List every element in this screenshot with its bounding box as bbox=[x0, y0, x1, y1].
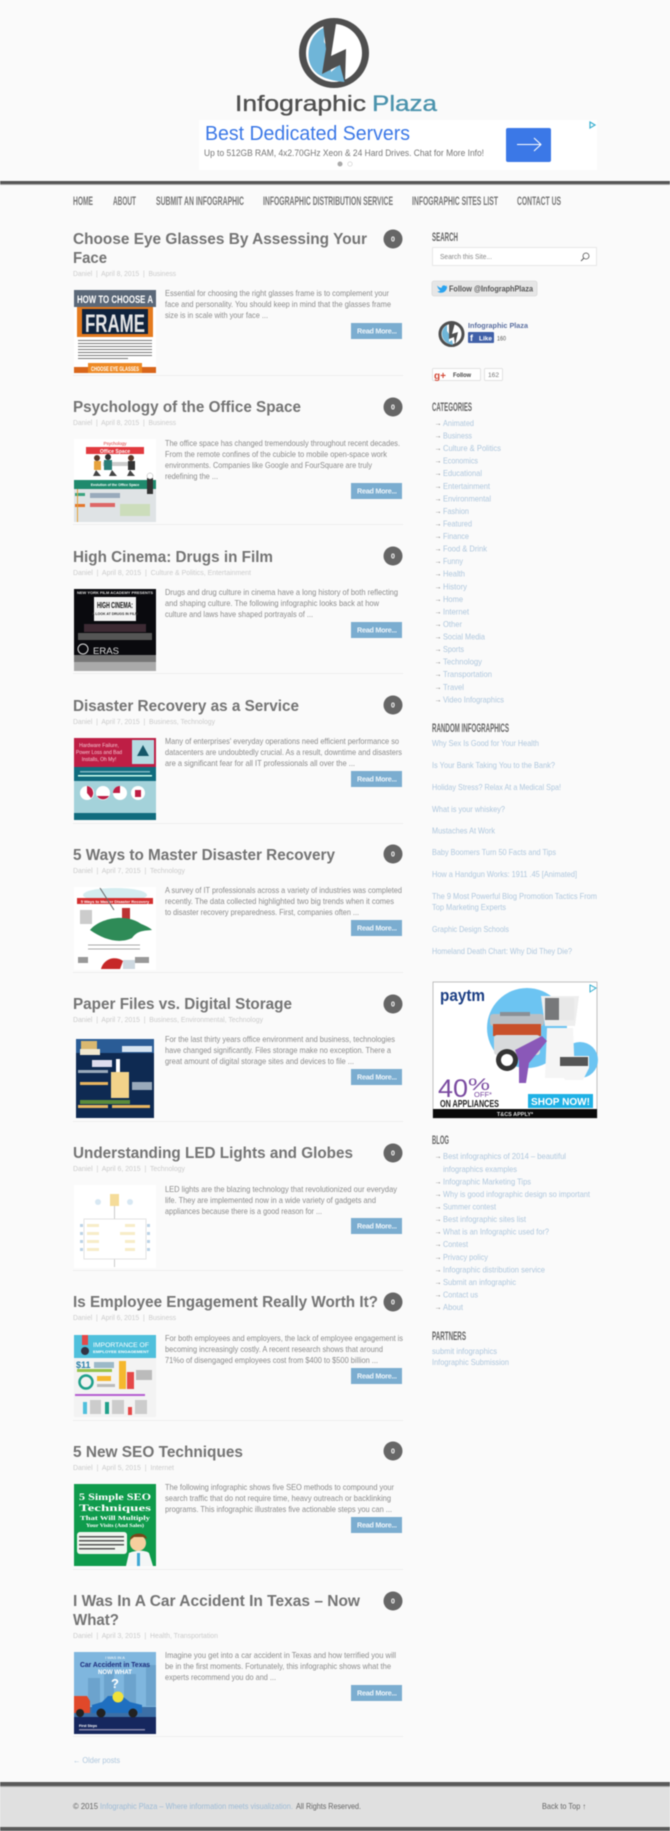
categories bbox=[432, 402, 504, 704]
excerpt bbox=[165, 1483, 394, 1514]
thumbnail: 5 Simple SEO bbox=[79, 1493, 151, 1503]
title: Understanding LED Lights and Globes bbox=[73, 1145, 353, 1162]
thumbnail bbox=[74, 290, 156, 373]
thumbnail: ERAS bbox=[93, 646, 119, 656]
twitter follow button bbox=[432, 281, 537, 296]
categories: → bbox=[434, 420, 442, 428]
categories: Finance bbox=[443, 532, 469, 541]
partners bbox=[432, 1331, 509, 1367]
facebook like box: Like bbox=[479, 336, 492, 342]
thumbnail: Techniques bbox=[79, 1504, 151, 1514]
excerpt: programs. This infographic illustrates five actionable steps you can ... bbox=[165, 1505, 392, 1514]
excerpt: From the remote confines of the cubicle to mobile open-space work bbox=[165, 450, 388, 459]
facebook like box: 160 bbox=[497, 336, 506, 342]
categories: Sports bbox=[443, 645, 464, 654]
title: High Cinema: Drugs in Film bbox=[73, 549, 273, 566]
excerpt: face and personality. You should keep in mind that the glasses frame bbox=[165, 300, 391, 309]
paytm ad: 40 bbox=[438, 1075, 468, 1103]
categories: → bbox=[434, 647, 442, 654]
back to top: Back to Top ↑ bbox=[542, 1802, 586, 1811]
categories: Business bbox=[443, 432, 472, 440]
title bbox=[73, 231, 367, 267]
read more button bbox=[351, 1218, 402, 1234]
categories: Other bbox=[443, 620, 462, 629]
thumbnail: 5 Ways to Master Disaster Recovery bbox=[81, 899, 150, 904]
post 5 bbox=[73, 844, 403, 973]
blog links: → bbox=[434, 1280, 442, 1286]
comment count bbox=[384, 1144, 402, 1162]
excerpt: culture and laws have shaped portrayals of ... bbox=[165, 610, 313, 619]
thumbnail: Evolution of the Office Space bbox=[91, 483, 139, 487]
footer bbox=[0, 1782, 670, 1831]
categories: → bbox=[434, 659, 442, 666]
excerpt: experts recommend you do and ... bbox=[165, 1673, 276, 1682]
copyright: Infographic Plaza – Where information meets visualization. bbox=[100, 1802, 293, 1811]
excerpt bbox=[165, 737, 402, 768]
thumbnail bbox=[74, 589, 156, 671]
random infographics: Graphic Design Schools bbox=[432, 925, 509, 934]
post 4 bbox=[73, 696, 403, 824]
ad banner: Best Dedicated Servers bbox=[205, 123, 410, 145]
excerpt: recently. The data collected highlighted two big trends when it comes bbox=[165, 897, 394, 906]
thumbnail: HOW TO CHOOSE A bbox=[77, 294, 153, 306]
blog links: → bbox=[434, 1179, 442, 1186]
logo wordmark: Infographic bbox=[235, 91, 366, 116]
header bbox=[199, 18, 597, 170]
categories: → bbox=[434, 471, 442, 478]
categories: → bbox=[434, 634, 442, 641]
comment count bbox=[384, 398, 402, 416]
comment count bbox=[384, 1442, 402, 1460]
random infographics: Holiday Stress? Relax At a Medical Spa! bbox=[432, 783, 561, 792]
excerpt: For both employees and employers, the lack of employee engagement is bbox=[165, 1334, 403, 1343]
read more button bbox=[351, 1368, 402, 1384]
read more button: Read More... bbox=[357, 924, 397, 932]
excerpt: Many of enterprises' everyday operations need efficient performance so bbox=[165, 737, 399, 746]
excerpt: becoming increasingly costly. A recent research shows that around bbox=[165, 1345, 383, 1354]
categories: → bbox=[434, 483, 442, 490]
post 10 bbox=[73, 1592, 403, 1737]
navigation bbox=[73, 196, 561, 208]
facebook like box: f bbox=[470, 333, 474, 343]
logo wordmark bbox=[235, 91, 438, 116]
title: Disaster Recovery as a Service bbox=[73, 698, 299, 715]
post 7 bbox=[73, 1144, 403, 1271]
read more button: Read More... bbox=[357, 486, 397, 496]
thumbnail: IMPORTANCE OF bbox=[93, 1343, 149, 1349]
categories: Fashion bbox=[443, 507, 469, 516]
excerpt: datacenters are undoubtedly crucial. As a result, downtime and disasters bbox=[165, 748, 402, 757]
read more button bbox=[351, 483, 402, 499]
search widget: Search this Site... bbox=[440, 252, 492, 261]
title: What? bbox=[73, 1612, 119, 1629]
blog links: → bbox=[434, 1229, 442, 1236]
categories: History bbox=[443, 582, 468, 591]
thumbnail: Hardware Failure, bbox=[79, 743, 119, 749]
comment count: 0 bbox=[391, 1150, 395, 1158]
paytm ad: % bbox=[468, 1075, 490, 1094]
meta: Daniel | April 5, 2015 | Internet bbox=[73, 1463, 175, 1472]
meta: Daniel | April 8, 2015 | Business bbox=[73, 269, 176, 278]
categories: → bbox=[434, 622, 442, 628]
excerpt bbox=[165, 439, 400, 481]
excerpt: LED lights are the blazing technology that revolutionized our everyday bbox=[165, 1185, 398, 1194]
thumbnail: Installs, Oh My! bbox=[82, 757, 116, 763]
thumbnail: CHOOSE EYE GLASSES bbox=[91, 367, 139, 373]
random infographics: Mustaches At Work bbox=[432, 826, 496, 836]
excerpt: are a significant fear for all IT professionals all over the ... bbox=[165, 759, 355, 768]
blog links: → bbox=[434, 1292, 442, 1299]
meta: Daniel | April 7, 2015 | Technology bbox=[73, 866, 185, 875]
excerpt: size is in scale with your face ... bbox=[165, 311, 268, 320]
partners: submit infographics bbox=[432, 1347, 497, 1356]
excerpt bbox=[165, 1334, 403, 1365]
excerpt: For the last thirty years office environment and business, technologies bbox=[165, 1035, 395, 1044]
blog links: → bbox=[434, 1216, 442, 1224]
paytm ad: T&CS APPLY* bbox=[497, 1112, 534, 1118]
comment count bbox=[384, 844, 402, 864]
blog links: Contest bbox=[443, 1240, 469, 1249]
title: Paper Files vs. Digital Storage bbox=[73, 996, 292, 1013]
random infographics: How a Handgun Works: 1911 .45 [Animated] bbox=[432, 870, 577, 879]
categories: → bbox=[434, 609, 442, 616]
excerpt: appliances because there is a good reason for ... bbox=[165, 1207, 322, 1216]
thumbnail bbox=[74, 1185, 156, 1268]
random infographics: Is Your Bank Taking You to the Bank? bbox=[432, 761, 555, 770]
excerpt: A survey of IT professionals across a variety of industries was completed bbox=[165, 886, 402, 895]
paytm ad bbox=[433, 982, 598, 1118]
excerpt: great amount of digital storage sites and devices to file ... bbox=[165, 1057, 354, 1066]
thumbnail: Car Accident in Texas bbox=[80, 1660, 150, 1669]
read more button bbox=[351, 323, 402, 339]
read more button: Read More... bbox=[357, 1372, 397, 1380]
categories: → bbox=[434, 446, 442, 453]
read more button: Read More... bbox=[357, 1520, 397, 1530]
excerpt: Imagine you get into a car accident in Texas and how terrified you will bbox=[165, 1651, 396, 1660]
categories: Transportation bbox=[443, 670, 492, 679]
blog links: → bbox=[434, 1192, 442, 1198]
navigation: HOME bbox=[73, 196, 93, 208]
read more button bbox=[351, 622, 402, 638]
thumbnail: EMPLOYEE ENGAGEMENT bbox=[93, 1349, 150, 1354]
google plus follow: Follow bbox=[453, 372, 472, 379]
random infographics: Why Sex Is Good for Your Health bbox=[432, 739, 539, 748]
post 3 bbox=[73, 546, 403, 674]
post 8 bbox=[73, 1292, 403, 1421]
excerpt: life. They are implemented now in a wide variety of gadgets and bbox=[165, 1196, 376, 1205]
thumbnail bbox=[74, 738, 156, 820]
blog links: Privacy policy bbox=[443, 1253, 489, 1262]
thumbnail bbox=[76, 1039, 154, 1118]
comment count bbox=[384, 1292, 402, 1312]
paytm ad: paytm bbox=[440, 986, 485, 1005]
excerpt: The following infographic shows five SEO methods to compound your bbox=[165, 1483, 394, 1492]
facebook like box bbox=[440, 321, 529, 346]
categories: → bbox=[434, 433, 442, 440]
categories: Health bbox=[443, 570, 465, 579]
post 2 bbox=[73, 398, 403, 525]
categories: Food & Drink bbox=[443, 545, 488, 554]
categories: → bbox=[434, 559, 442, 566]
title: 5 Ways to Master Disaster Recovery bbox=[73, 847, 335, 864]
logo wordmark: Plaza bbox=[372, 91, 438, 116]
title: Is Employee Engagement Really Worth It? bbox=[73, 1294, 378, 1311]
comment count: 0 bbox=[391, 1448, 395, 1456]
title: I Was In A Car Accident In Texas – Now bbox=[73, 1593, 361, 1610]
blog links: → bbox=[434, 1254, 442, 1262]
search widget bbox=[432, 232, 596, 266]
thumbnail: Your Visits (And Sales) bbox=[86, 1524, 144, 1529]
categories: Social Media bbox=[443, 632, 485, 642]
categories: Technology bbox=[443, 658, 483, 667]
random infographics: What is your whiskey? bbox=[432, 805, 505, 814]
thumbnail bbox=[74, 887, 156, 970]
random infographics: Homeland Death Chart: Why Did They Die? bbox=[432, 947, 572, 956]
excerpt: Essential for choosing the right glasses frame is to complement your bbox=[165, 289, 389, 298]
comment count bbox=[384, 546, 402, 566]
meta: Daniel | April 3, 2015 | Health, Transportation bbox=[73, 1631, 218, 1640]
blog links: → bbox=[434, 1204, 442, 1211]
thumbnail bbox=[74, 1335, 156, 1417]
categories: CATEGORIES bbox=[432, 402, 472, 414]
random infographics: RANDOM INFOGRAPHICS bbox=[432, 723, 509, 735]
categories: Travel bbox=[443, 683, 464, 692]
categories: → bbox=[434, 458, 442, 465]
blog links: Summer contest bbox=[443, 1202, 497, 1212]
blog links: Best infographics of 2014 – beautiful bbox=[443, 1152, 566, 1161]
twitter follow button: Follow @InfographPlaza bbox=[449, 284, 533, 294]
excerpt: 71%o of disengaged employees cost from $400 to $500 billion ... bbox=[165, 1356, 378, 1365]
categories: Featured bbox=[443, 520, 472, 528]
comment count: 0 bbox=[391, 702, 395, 710]
title: Choose Eye Glasses By Assessing Your bbox=[73, 231, 367, 248]
thumbnail bbox=[74, 439, 156, 522]
title: Psychology of the Office Space bbox=[73, 399, 301, 416]
blog links: About bbox=[443, 1303, 464, 1312]
excerpt: have changed significantly. Files storage make no exception. There a bbox=[165, 1046, 391, 1055]
blog links: Infographic Marketing Tips bbox=[443, 1178, 531, 1186]
excerpt: search traffic that do not require time, heavy outreach or backlinking bbox=[165, 1494, 391, 1503]
meta: Daniel | April 7, 2015 | Business, Environmental, Technology bbox=[73, 1015, 263, 1024]
navigation: ABOUT bbox=[113, 196, 136, 208]
categories: Home bbox=[443, 595, 463, 604]
comment count: 0 bbox=[391, 404, 395, 412]
read more button: Read More... bbox=[357, 774, 397, 784]
thumbnail bbox=[74, 1652, 156, 1734]
blog links: Contact us bbox=[443, 1290, 478, 1300]
sidebar bbox=[432, 232, 598, 1367]
thumbnail: A LOOK AT DRUGS IN FILM bbox=[92, 612, 138, 616]
excerpt bbox=[165, 1035, 395, 1066]
excerpt: to disaster recovery preparedness. First, companies often ... bbox=[165, 908, 359, 917]
google plus follow: 162 bbox=[488, 372, 499, 379]
blog links: → bbox=[434, 1267, 442, 1274]
comment count bbox=[384, 1592, 402, 1610]
excerpt bbox=[165, 289, 391, 320]
thumbnail: Psychology bbox=[103, 441, 127, 446]
older posts link: ← Older posts bbox=[73, 1756, 120, 1765]
categories: → bbox=[434, 596, 442, 603]
google plus follow bbox=[432, 368, 502, 382]
read more button: Read More... bbox=[357, 1222, 397, 1230]
meta: Daniel | April 8, 2015 | Business bbox=[73, 418, 176, 427]
thumbnail: Office Space bbox=[100, 449, 130, 455]
paytm ad: SHOP NOW! bbox=[531, 1096, 590, 1108]
blog links: Infographic distribution service bbox=[443, 1266, 545, 1274]
blog links: What is an Infographic used for? bbox=[443, 1228, 549, 1236]
thumbnail: That Will Multiply bbox=[80, 1515, 151, 1522]
blog links: → bbox=[434, 1304, 442, 1312]
thumbnail: NEW YORK FILM ACADEMY PRESENTS bbox=[77, 591, 154, 595]
categories: Funny bbox=[443, 557, 464, 566]
google plus follow: g+ bbox=[434, 371, 446, 382]
facebook like box: Infographic Plaza bbox=[468, 321, 529, 330]
navigation: CONTACT US bbox=[517, 196, 561, 208]
meta: Daniel | April 7, 2015 | Business, Technology bbox=[73, 717, 215, 726]
copyright: © 2015 bbox=[73, 1802, 98, 1811]
categories: Economics bbox=[443, 457, 478, 466]
excerpt: be in the first moments. Fortunately, this infographic shows what the bbox=[165, 1662, 391, 1671]
blog links bbox=[432, 1135, 591, 1312]
thumbnail: FRAME bbox=[85, 310, 145, 338]
navigation: SUBMIT AN INFOGRAPHIC bbox=[156, 196, 244, 208]
title: 5 New SEO Techniques bbox=[73, 1444, 243, 1461]
blog links: Submit an infographic bbox=[443, 1278, 516, 1287]
post 6 bbox=[73, 994, 403, 1122]
categories: → bbox=[434, 508, 442, 515]
title: Face bbox=[73, 250, 107, 267]
read more button: Read More... bbox=[357, 626, 397, 634]
read more button: Read More... bbox=[357, 1072, 397, 1082]
meta: Daniel | April 8, 2015 | Culture & Politics, Entertainment bbox=[73, 568, 252, 577]
comment count: 0 bbox=[391, 554, 395, 560]
excerpt bbox=[165, 1651, 396, 1682]
blog links: infographics examples bbox=[443, 1165, 517, 1174]
read more button bbox=[351, 1069, 402, 1085]
thumbnail: NOW WHAT bbox=[98, 1670, 132, 1676]
categories: Internet bbox=[443, 607, 470, 616]
ad banner bbox=[199, 120, 597, 170]
categories: Video Infographics bbox=[443, 695, 504, 704]
comment count: 0 bbox=[391, 852, 395, 858]
categories: → bbox=[434, 546, 442, 553]
blog links: → bbox=[434, 1242, 442, 1248]
blog links: BLOG bbox=[432, 1135, 449, 1147]
comment count: 0 bbox=[391, 1598, 395, 1606]
meta: Daniel | April 6, 2015 | Business bbox=[73, 1313, 176, 1322]
categories: Animated bbox=[443, 419, 474, 428]
blog links: → bbox=[434, 1154, 442, 1160]
excerpt bbox=[165, 1185, 398, 1216]
read more button bbox=[351, 920, 402, 936]
comment count bbox=[384, 230, 402, 248]
post 1 bbox=[73, 230, 403, 376]
comment count: 0 bbox=[391, 1002, 395, 1008]
comment count: 0 bbox=[391, 1300, 395, 1306]
excerpt: Drugs and drug culture in cinema have a long history of both reflecting bbox=[165, 588, 398, 597]
categories: Culture & Politics bbox=[443, 444, 501, 453]
navigation: INFOGRAPHIC SITES LIST bbox=[412, 196, 498, 208]
read more button: Read More... bbox=[357, 1688, 397, 1698]
thumbnail: I WAS IN A bbox=[105, 1655, 125, 1660]
categories: Educational bbox=[443, 469, 482, 478]
partners: Infographic Submission bbox=[432, 1358, 509, 1367]
random infographics bbox=[432, 723, 597, 956]
excerpt: environments. Companies like Google and FourSquare are truly bbox=[165, 461, 373, 470]
thumbnail: $11 bbox=[76, 1360, 91, 1370]
copyright: All Rights Reserved. bbox=[296, 1802, 361, 1811]
categories: → bbox=[434, 672, 442, 679]
blog links: Best infographic sites list bbox=[443, 1215, 527, 1224]
categories: → bbox=[434, 584, 442, 591]
categories: → bbox=[434, 496, 442, 503]
read more button bbox=[351, 771, 402, 787]
excerpt: and shaping culture. The following infographic looks back at how bbox=[165, 599, 379, 608]
comment count: 0 bbox=[391, 236, 395, 244]
random infographics: Top Marketing Experts bbox=[432, 903, 506, 912]
categories: → bbox=[434, 571, 442, 578]
blog links: Why is good infographic design so important bbox=[443, 1190, 591, 1199]
excerpt bbox=[165, 588, 398, 619]
meta: Daniel | April 6, 2015 | Technology bbox=[73, 1164, 185, 1173]
thumbnail: Power Loss and Bad bbox=[76, 750, 122, 756]
random infographics: Baby Boomers Turn 50 Facts and Tips bbox=[432, 848, 556, 857]
thumbnail: First Steps bbox=[79, 1724, 97, 1728]
paytm ad: OFF* bbox=[474, 1092, 492, 1099]
categories: → bbox=[434, 521, 442, 528]
categories: → bbox=[434, 534, 442, 540]
categories: Entertainment bbox=[443, 482, 491, 491]
read more button bbox=[351, 1517, 402, 1533]
thumbnail: HIGH CINEMA: bbox=[97, 600, 133, 610]
partners: PARTNERS bbox=[432, 1331, 466, 1343]
comment count bbox=[384, 994, 402, 1014]
navigation: INFOGRAPHIC DISTRIBUTION SERVICE bbox=[263, 196, 393, 208]
read more button: Read More... bbox=[357, 326, 397, 336]
paytm ad: ON APPLIANCES bbox=[440, 1099, 499, 1110]
title bbox=[73, 1593, 361, 1629]
thumbnail: ? bbox=[111, 1676, 119, 1691]
categories: Environmental bbox=[443, 494, 491, 503]
thumbnail bbox=[74, 1484, 156, 1566]
post 9 bbox=[73, 1442, 403, 1570]
excerpt: The office space has changed tremendously throughout recent decades. bbox=[165, 439, 400, 448]
search widget: SEARCH bbox=[432, 232, 458, 244]
read more button bbox=[351, 1685, 402, 1701]
excerpt: redefining the ... bbox=[165, 472, 218, 481]
excerpt bbox=[165, 886, 402, 917]
categories: → bbox=[434, 684, 442, 691]
ad banner: Up to 512GB RAM, 4x2.70GHz Xeon & 24 Hard Drives. Chat for More Info! bbox=[204, 148, 484, 159]
icon: logo mark bbox=[299, 18, 369, 88]
categories: → bbox=[434, 697, 442, 704]
comment count bbox=[384, 696, 402, 714]
random infographics: The 9 Most Powerful Blog Promotion Tactics From bbox=[432, 892, 597, 901]
